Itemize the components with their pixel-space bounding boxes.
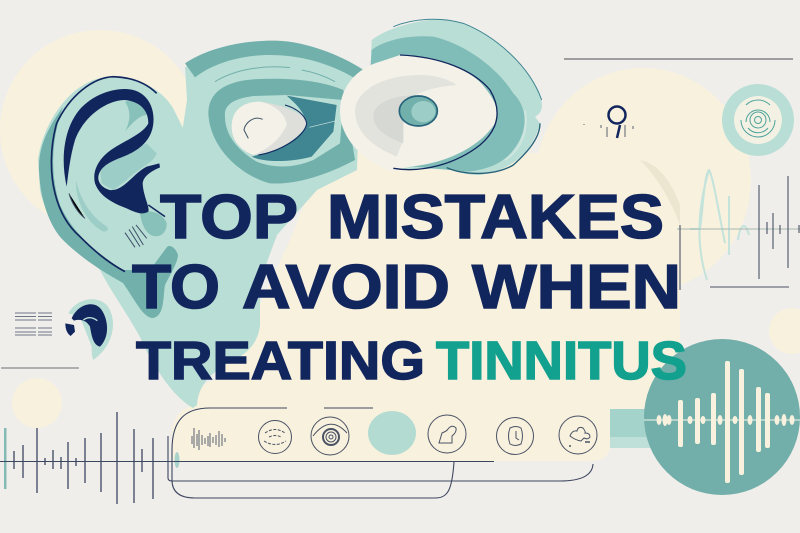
title line 2: AVOID	[242, 253, 450, 322]
mint connector block	[610, 409, 655, 448]
concentric sound icon	[722, 84, 794, 156]
disc outline	[393, 55, 497, 170]
ear outline	[51, 77, 157, 272]
title line 1	[160, 183, 664, 252]
icon: eye circle	[311, 417, 349, 455]
rim crescent	[76, 180, 108, 232]
concha wash	[100, 143, 157, 190]
bottom left waveform	[4, 412, 180, 504]
thin highlight arc	[215, 67, 335, 82]
shell lower band	[447, 123, 540, 173]
teal rim and lower shadow	[39, 107, 178, 318]
ring inner mint	[225, 95, 343, 166]
disc center lens	[399, 96, 437, 126]
title line 3 navy: TREATING	[136, 331, 425, 391]
title word TINNITUS: TINNITUS	[436, 331, 687, 391]
ear and face mint shape	[38, 45, 360, 408]
lobe shadow	[140, 211, 167, 236]
title	[132, 183, 681, 391]
helix wash	[125, 101, 147, 132]
title line 2: TO	[132, 253, 220, 322]
waveform axis	[677, 228, 800, 230]
mini waveform icon	[192, 428, 225, 450]
icon: pills circle	[559, 416, 597, 454]
mint spike wave	[690, 170, 749, 280]
outer shell	[371, 19, 542, 175]
grey ring on disc	[355, 75, 457, 157]
mint dot	[368, 411, 416, 455]
top right line	[564, 58, 793, 60]
small figure icon	[584, 106, 633, 138]
shell teal band	[371, 36, 525, 172]
shell top outline	[393, 19, 542, 100]
top teal arc	[185, 41, 363, 78]
title line 1: MISTAKES	[327, 183, 664, 252]
teal ring device	[185, 41, 363, 184]
large earbud	[340, 19, 542, 175]
navy helix	[64, 89, 160, 213]
lower outline frames	[0, 408, 593, 498]
title line 2	[132, 253, 681, 322]
large ear illustration	[38, 45, 360, 408]
left divider line	[1, 367, 79, 369]
lobe lines	[69, 193, 147, 247]
large sound wave circle	[644, 339, 800, 495]
icon: capsule circle	[496, 418, 534, 454]
icon: hand circle	[428, 415, 466, 453]
soft fold on cream panel	[640, 160, 680, 225]
earbud small	[232, 102, 307, 155]
text lines icon	[15, 313, 52, 335]
icon: face circle	[258, 420, 292, 454]
title line 2: WHEN	[472, 253, 681, 322]
right waveform	[677, 170, 800, 290]
dark teal cavity	[252, 96, 337, 161]
ring band	[208, 79, 355, 184]
shell light stripe	[505, 110, 526, 160]
tragus tail line	[148, 205, 165, 217]
small ear icon	[65, 299, 113, 360]
title line 1: TOP	[160, 183, 298, 252]
main white disc	[340, 55, 497, 172]
